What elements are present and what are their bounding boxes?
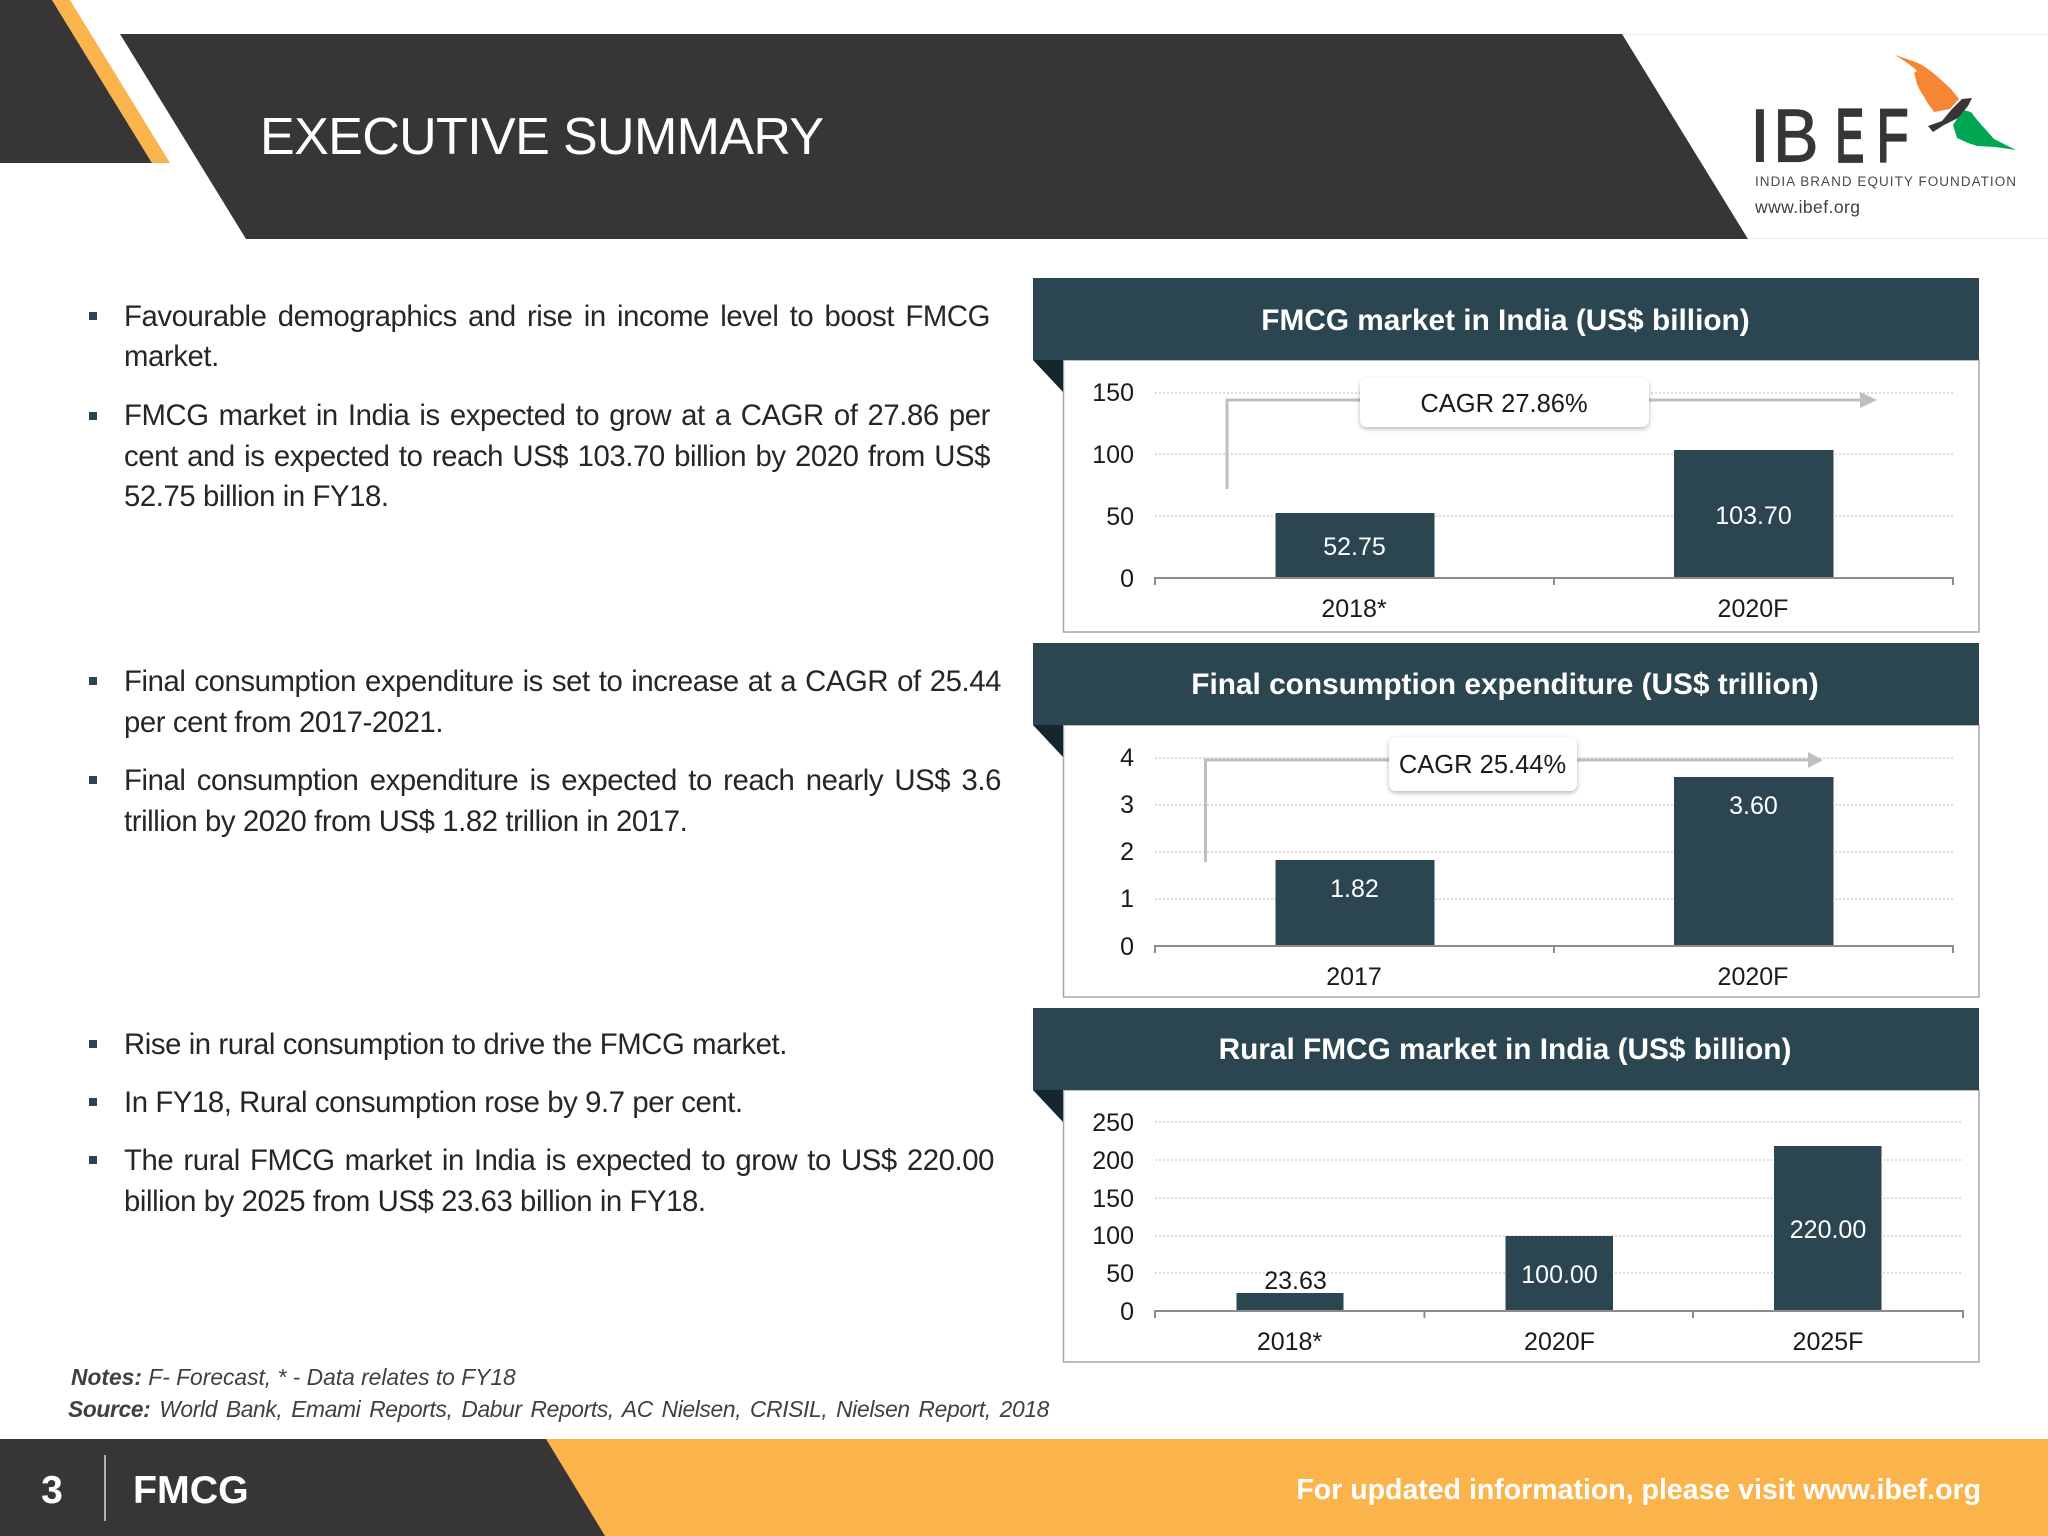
logo wordmark: B bbox=[1773, 95, 1819, 178]
footer link text: For updated information, please visit www.ibef.org bbox=[1296, 1474, 1981, 1506]
bar chart: 4 bbox=[1120, 744, 1134, 772]
text block: consumption expenditure bullets: per cent from 2017-2021. bbox=[124, 706, 443, 739]
text block: consumption expenditure bullets: Final consumption expenditure is expected to reach nearly US$ 3.6 bbox=[124, 764, 1001, 797]
chart heading bbox=[1033, 278, 1979, 360]
text block: rural consumption bullets: billion by 2025 from US$ 23.63 billion in FY18. bbox=[124, 1185, 706, 1218]
text block: rural consumption bullets: Rise in rural consumption to drive the FMCG market. bbox=[124, 1028, 787, 1061]
bar chart: 0 bbox=[1120, 1298, 1134, 1326]
bar chart: 2018* bbox=[1321, 595, 1387, 623]
bar chart: 23.63 bbox=[1264, 1267, 1327, 1295]
text block: rural consumption bullets: The rural FMCG market in India is expected to grow to US$ 220.00 bbox=[124, 1144, 994, 1177]
text block: rural consumption bullets: In FY18, Rural consumption rose by 9.7 per cent. bbox=[124, 1086, 743, 1119]
bar chart: 52.75 bbox=[1323, 533, 1386, 561]
bar chart: 2 bbox=[1120, 838, 1134, 866]
bar chart: 50 bbox=[1106, 503, 1134, 531]
logo wordmark: E bbox=[1836, 94, 1864, 177]
section name: FMCG bbox=[133, 1468, 249, 1512]
panel: Rural FMCG market in India bbox=[1033, 1008, 1980, 1363]
callout: CAGR 27.86%: CAGR 27.86% bbox=[1420, 390, 1588, 418]
bar chart: 0 bbox=[1120, 933, 1134, 961]
bar chart: 100 bbox=[1092, 441, 1134, 469]
bar chart: 3 bbox=[1120, 791, 1134, 819]
bar chart: 250 bbox=[1092, 1109, 1134, 1137]
chart heading bbox=[1033, 1008, 1979, 1090]
logo wordmark bbox=[1750, 93, 1909, 178]
panel: Final consumption expenditure bbox=[1033, 643, 1980, 998]
text block: consumption expenditure bullets bbox=[89, 665, 1001, 838]
panel: FMCG market in India bbox=[1033, 278, 1980, 633]
header band bbox=[0, 0, 2048, 239]
arrow: CAGR growth bbox=[1227, 392, 1877, 489]
callout: CAGR 25.44%: CAGR 25.44% bbox=[1399, 751, 1566, 779]
text block: FMCG market bullets bbox=[89, 300, 990, 513]
icon: bird body bbox=[1928, 98, 1972, 132]
bar chart: 3.60 bbox=[1729, 792, 1778, 820]
bar chart: 103.70 bbox=[1715, 502, 1792, 530]
title: EXECUTIVE SUMMARY bbox=[260, 108, 824, 166]
text block: consumption expenditure bullets: trillion by 2020 from US$ 1.82 trillion in 2017. bbox=[124, 805, 687, 838]
text block: FMCG market bullets: FMCG market in India is expected to grow at a CAGR of 27.86 per bbox=[124, 399, 990, 432]
text block: FMCG market bullets: market. bbox=[124, 340, 219, 373]
bar chart: 0 bbox=[1120, 565, 1134, 593]
page number: 3 bbox=[41, 1469, 63, 1512]
bar chart bbox=[1092, 379, 1953, 623]
arrow: CAGR growth bbox=[1206, 752, 1823, 862]
bar chart: 2020F bbox=[1524, 1328, 1595, 1356]
text block: FMCG market bullets: cent and is expected to reach US$ 103.70 billion by 2020 from US$ bbox=[124, 440, 990, 473]
bar chart bbox=[1092, 1109, 1963, 1356]
bar chart bbox=[1120, 744, 1953, 991]
callout: CAGR 27.86% bbox=[1360, 378, 1649, 427]
logo wordmark: I bbox=[1750, 94, 1770, 178]
bar chart: 2017 bbox=[1326, 963, 1382, 991]
callout: CAGR 25.44% bbox=[1389, 737, 1577, 791]
bar chart: 150 bbox=[1092, 1185, 1134, 1213]
source: Source: World Bank, Emami Reports, Dabur Reports, AC Nielsen, CRISIL, Nielsen Report, 2018 bbox=[68, 1396, 1049, 1422]
bar chart: 1 bbox=[1120, 885, 1134, 913]
bar chart: 100.00 bbox=[1521, 1261, 1598, 1289]
icon: orange bird wing bbox=[1895, 55, 1959, 112]
chart heading: Rural FMCG market in India (US$ billion) bbox=[1219, 1033, 1791, 1066]
bar chart: 200 bbox=[1092, 1147, 1134, 1175]
bar chart: 2018* bbox=[1257, 1328, 1322, 1356]
bar chart: 150 bbox=[1092, 379, 1134, 407]
text block: FMCG market bullets: 52.75 billion in FY18. bbox=[124, 480, 389, 513]
bar chart: 100 bbox=[1092, 1222, 1134, 1250]
logo tagline: INDIA BRAND EQUITY FOUNDATION bbox=[1755, 174, 2016, 189]
icon: green bird wing bbox=[1953, 110, 2016, 150]
bar chart: 50 bbox=[1106, 1260, 1134, 1288]
notes: Notes: F- Forecast, * - Data relates to FY18 bbox=[71, 1364, 516, 1390]
bar chart: 2025F bbox=[1793, 1328, 1863, 1356]
text block: rural consumption bullets bbox=[89, 1028, 994, 1218]
logo: IBEF bbox=[1750, 55, 2016, 217]
bar chart: 1.82 bbox=[1330, 875, 1379, 903]
chart heading bbox=[1033, 643, 1979, 725]
footer band bbox=[0, 1439, 2048, 1536]
logo wordmark: F bbox=[1876, 93, 1909, 178]
chart heading: FMCG market in India (US$ billion) bbox=[1261, 304, 1750, 337]
logo url: www.ibef.org bbox=[1754, 197, 1860, 217]
text block: consumption expenditure bullets: Final consumption expenditure is set to increase at a CAGR of 25.44 bbox=[124, 665, 1001, 698]
chart heading: Final consumption expenditure (US$ trillion) bbox=[1191, 668, 1819, 701]
bar chart: 220.00 bbox=[1790, 1216, 1866, 1244]
bar chart: 2020F bbox=[1718, 595, 1788, 623]
text block: FMCG market bullets: Favourable demographics and rise in income level to boost FMCG bbox=[124, 300, 990, 333]
bar chart: 2020F bbox=[1718, 963, 1788, 991]
